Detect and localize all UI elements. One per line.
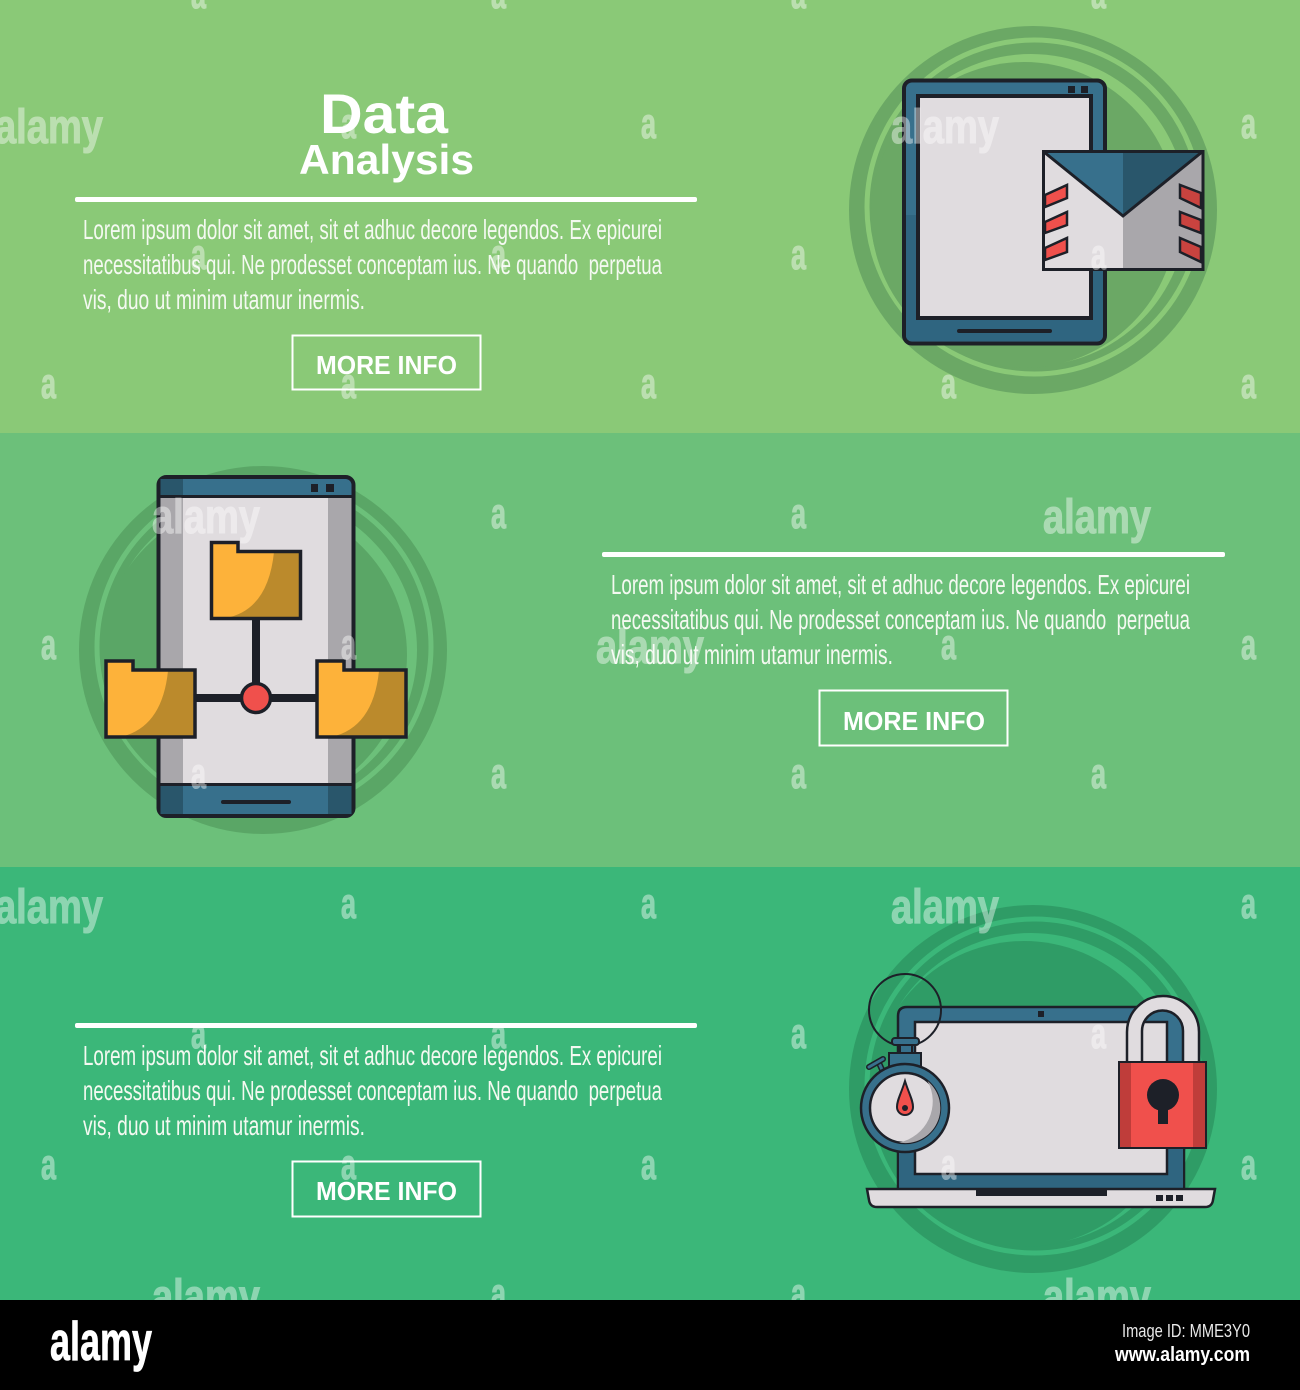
icon: tablet with envelope xyxy=(849,26,1217,394)
footer logo: alamy xyxy=(50,1310,152,1372)
text block xyxy=(83,214,662,315)
stock watermarks: a xyxy=(491,231,507,279)
footer bar xyxy=(0,1300,1300,1390)
stock watermarks: alamy xyxy=(596,621,704,674)
heading rule xyxy=(75,197,697,202)
stock watermarks: a xyxy=(491,490,507,538)
stock watermarks: a xyxy=(791,1270,807,1318)
stock watermarks: a xyxy=(641,880,657,928)
stock watermarks: a xyxy=(1241,621,1257,669)
stock watermarks: a xyxy=(641,1141,657,1189)
stock watermarks: a xyxy=(341,100,357,148)
stock watermarks: a xyxy=(41,1141,57,1189)
stock watermarks: alamy xyxy=(1043,1271,1151,1324)
phone body xyxy=(158,477,354,816)
panel: top banner content xyxy=(75,82,697,390)
text block: Lorem ipsum dolor sit amet, sit et adhuc decore legendos. Ex epicurei xyxy=(83,214,662,245)
stock watermarks: a xyxy=(941,360,957,408)
stock watermarks: a xyxy=(941,1141,957,1189)
stock watermarks: a xyxy=(341,360,357,408)
swirl circle behind tablet xyxy=(849,26,1217,394)
stock watermarks: a xyxy=(1241,1141,1257,1189)
stock watermarks: a xyxy=(1091,750,1107,798)
folder: right xyxy=(317,661,406,737)
stock watermarks: a xyxy=(191,750,207,798)
stock watermarks: a xyxy=(491,1010,507,1058)
stock watermarks: a xyxy=(41,360,57,408)
swirl circle behind phone xyxy=(79,466,447,834)
stock watermarks: a xyxy=(41,621,57,669)
stock watermarks: a xyxy=(191,231,207,279)
text block xyxy=(611,569,1190,670)
stock watermarks: alamy xyxy=(891,101,999,154)
laptop xyxy=(867,1007,1215,1207)
stock watermarks: a xyxy=(791,750,807,798)
button: more info xyxy=(820,690,1008,746)
title: Analysis: Analysis xyxy=(299,136,474,183)
stock watermarks: a xyxy=(341,1141,357,1189)
stock watermarks: a xyxy=(341,621,357,669)
stock watermarks: a xyxy=(941,621,957,669)
text block: Lorem ipsum dolor sit amet, sit et adhuc decore legendos. Ex epicurei xyxy=(83,1040,662,1071)
stock watermarks: a xyxy=(491,750,507,798)
website: www.alamy.com xyxy=(1114,1344,1250,1366)
stock watermarks: a xyxy=(191,1010,207,1058)
stock watermarks: a xyxy=(791,1010,807,1058)
envelope xyxy=(1044,152,1203,270)
stock watermarks: a xyxy=(1091,1010,1107,1058)
stock watermarks: a xyxy=(641,360,657,408)
title: Data: Data xyxy=(320,82,449,145)
text block: vis, duo ut minim utamur inermis. xyxy=(83,284,365,315)
folder: top xyxy=(212,542,300,618)
panel: top banner background xyxy=(0,0,1300,433)
image id: Image ID: MME3Y0 xyxy=(1122,1321,1250,1341)
stock watermarks: a xyxy=(1241,880,1257,928)
button: more info: MORE INFO xyxy=(316,1176,457,1206)
text block: vis, duo ut minim utamur inermis. xyxy=(611,639,893,670)
stock watermarks: a xyxy=(1091,231,1107,279)
panel: middle banner content xyxy=(602,552,1225,746)
icon: smartphone with folder network xyxy=(79,466,447,834)
stock watermarks: a xyxy=(791,490,807,538)
stopwatch xyxy=(861,974,949,1152)
padlock xyxy=(1119,996,1206,1148)
text block: necessitatibus qui. Ne prodesset conceptam ius. Ne quando perpetua xyxy=(83,249,662,280)
panel: bottom banner background xyxy=(0,867,1300,1300)
panel: bottom banner content xyxy=(75,1023,697,1216)
icon: laptop with stopwatch and padlock xyxy=(849,905,1217,1273)
text block xyxy=(83,1040,662,1141)
stock watermarks: alamy xyxy=(152,1271,260,1324)
network node xyxy=(242,684,270,712)
stock watermarks: a xyxy=(341,880,357,928)
button: more info: MORE INFO xyxy=(316,350,457,380)
button: more info: MORE INFO xyxy=(843,706,985,736)
network connectors xyxy=(195,619,317,698)
panel: middle banner background xyxy=(0,433,1300,867)
stock watermarks: alamy xyxy=(152,491,260,544)
swirl circle behind laptop xyxy=(849,905,1217,1273)
stock watermarks: alamy xyxy=(1043,491,1151,544)
stock watermarks: a xyxy=(1241,100,1257,148)
text block: vis, duo ut minim utamur inermis. xyxy=(83,1110,365,1141)
stock watermarks: a xyxy=(641,100,657,148)
button: more info xyxy=(292,336,480,390)
stock watermarks: alamy xyxy=(891,881,999,934)
tablet body xyxy=(904,80,1105,344)
stock watermarks: a xyxy=(1241,360,1257,408)
stock watermarks: a xyxy=(491,1270,507,1318)
stock watermarks: a xyxy=(791,231,807,279)
text block: necessitatibus qui. Ne prodesset conceptam ius. Ne quando perpetua xyxy=(83,1075,662,1106)
button: more info xyxy=(292,1162,480,1216)
heading rule xyxy=(75,1023,697,1028)
folder: left xyxy=(106,661,195,737)
heading rule xyxy=(602,552,1225,557)
